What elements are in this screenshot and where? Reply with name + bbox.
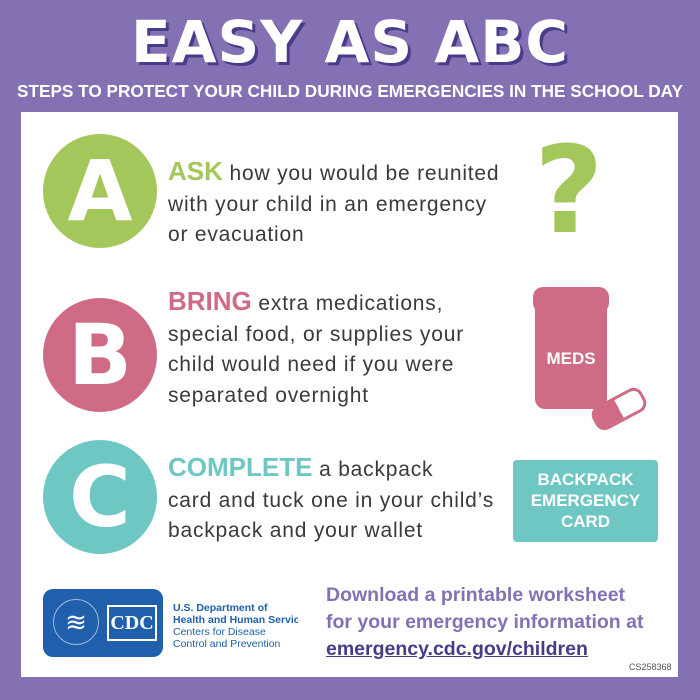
- code: CS258368: [629, 662, 672, 672]
- circle B: [43, 298, 157, 412]
- text A: with your child in an emergency: [168, 192, 487, 216]
- text B: [168, 286, 464, 406]
- text A: [168, 156, 499, 246]
- icon: meds bottle: MEDS: [546, 349, 596, 368]
- text C: [168, 452, 494, 542]
- panel: main: [21, 112, 678, 677]
- text B: separated overnight: [168, 384, 369, 406]
- text C: COMPLETE a backpack: [168, 452, 433, 482]
- icon: pill: [588, 384, 650, 434]
- text A: or evacuation: [168, 223, 304, 246]
- text B: child would need if you were: [168, 353, 454, 376]
- callout: download: Download a printable worksheet: [326, 584, 625, 606]
- icon: backpack card: BACKPACK: [537, 470, 634, 489]
- logo: HHS CDC: CDC: [110, 612, 154, 634]
- text: agency: U.S. Department of: [173, 602, 268, 614]
- text: agency: [173, 602, 298, 650]
- subtitle: STEPS TO PROTECT YOUR CHILD DURING EMERGENCIES IN THE SCHOOL DAY: [17, 81, 683, 101]
- logo: HHS CDC: ≋: [65, 607, 87, 637]
- circle B: B: [68, 306, 132, 404]
- text B: special food, or supplies your: [168, 322, 464, 346]
- circle A: [43, 134, 157, 248]
- circle A: A: [67, 142, 132, 240]
- logo: HHS CDC: [43, 589, 163, 657]
- icon: backpack card: [513, 460, 658, 542]
- text: agency: Control and Prevention: [173, 638, 280, 650]
- text C: card and tuck one in your child’s: [168, 488, 494, 512]
- title: EASY AS ABC: [131, 8, 569, 76]
- text: agency: Centers for Disease: [173, 626, 266, 638]
- callout: download: emergency.cdc.gov/children: [326, 638, 588, 660]
- circle C: C: [69, 448, 131, 546]
- text C: backpack and your wallet: [168, 519, 423, 542]
- icon: question mark: ?: [534, 122, 604, 261]
- circle C: [43, 440, 157, 554]
- text A: ASK how you would be reunited: [168, 156, 499, 186]
- text B: BRING extra medications,: [168, 286, 443, 316]
- icon: meds bottle: [533, 287, 609, 409]
- icon: backpack card: EMERGENCY: [531, 491, 640, 510]
- callout: download: for your emergency information at: [326, 611, 643, 633]
- icon: backpack card: CARD: [561, 512, 610, 531]
- callout: download: [326, 584, 644, 660]
